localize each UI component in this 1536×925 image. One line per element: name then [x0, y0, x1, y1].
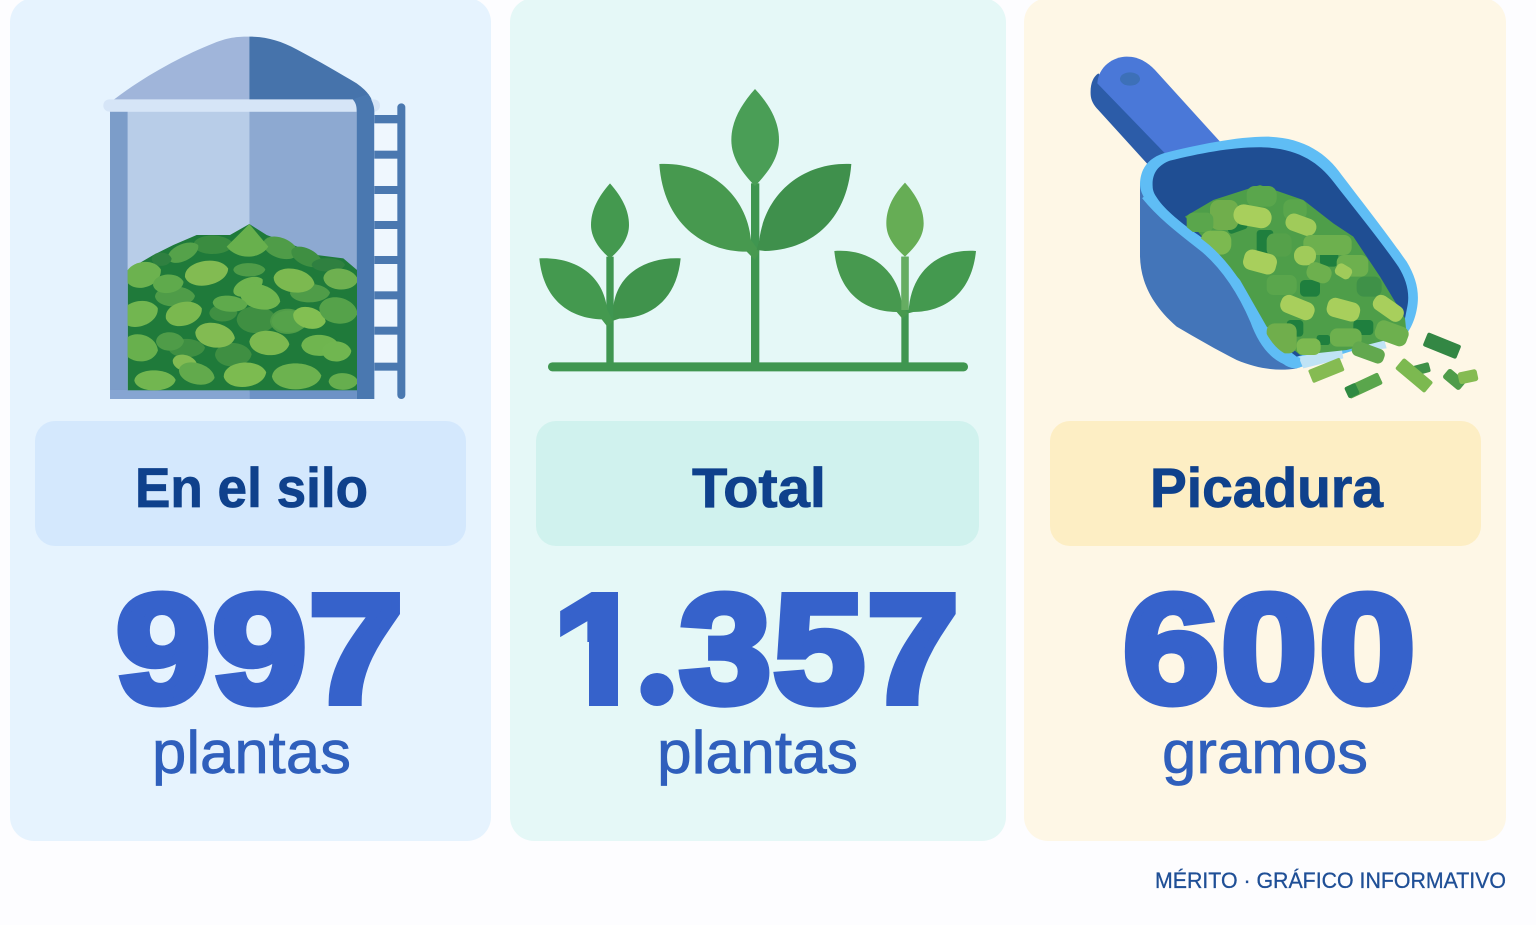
- front rim: [1146, 195, 1300, 363]
- plant: right: [834, 183, 976, 319]
- scoop handle: [1091, 57, 1220, 165]
- number: 1.357: .: [629, 530, 687, 743]
- plant: center: [659, 89, 851, 260]
- number: 1.357: [560, 590, 956, 708]
- label pill: En el silo: En el silo: [135, 456, 368, 519]
- panel: picadura: [1024, 0, 1506, 841]
- scoop interior and rim: [1140, 137, 1418, 368]
- icon: ladder: [374, 103, 405, 399]
- label pill: Picadura: Picadura: [1150, 456, 1384, 519]
- unit: plantas: plantas: [152, 719, 351, 786]
- icon: scoop with chopped silage: [1091, 57, 1479, 399]
- number: 1.357: 1: [553, 563, 647, 735]
- plant: left: [539, 183, 681, 327]
- number: 1.357: 357: [679, 563, 961, 735]
- label pill: Picadura: [1050, 421, 1481, 546]
- label pill: Total: [536, 421, 979, 546]
- panel: en el silo: [10, 0, 491, 841]
- front rim highlight: [1298, 348, 1343, 368]
- icon: three plants: [539, 89, 976, 371]
- panel: total: [510, 0, 1006, 841]
- unit: gramos: gramos: [1162, 719, 1368, 786]
- icon: silo: [103, 37, 405, 399]
- chopped silage in scoop: [1185, 185, 1411, 365]
- scoop body: [1140, 183, 1323, 370]
- label pill: Total: Total: [692, 456, 826, 519]
- footer credit: MÉRITO · GRÁFICO INFORMATIVO: [1155, 868, 1506, 893]
- silage pile: [117, 224, 360, 390]
- number: 997: 997: [116, 563, 405, 735]
- number: 600: 600: [1123, 563, 1418, 735]
- falling chips: [1308, 332, 1479, 399]
- label pill: En el silo: [35, 421, 466, 546]
- unit: plantas: plantas: [657, 719, 858, 786]
